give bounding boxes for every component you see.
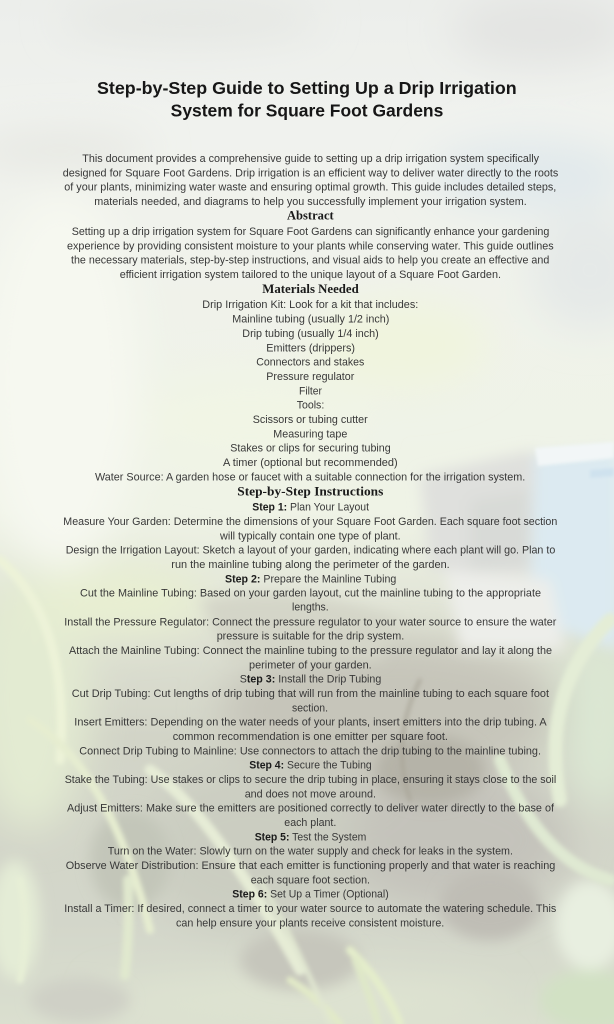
step 2: Step 2: Prepare the Mainline Tubing (225, 573, 396, 585)
step 3: Insert Emitters: Depending on the water needs of your plants, insert emitters into the drip tubing. A (74, 717, 547, 729)
step 3: Step 3: Install the Drip Tubing (240, 674, 381, 686)
abstract text (67, 226, 554, 281)
step 5: Step 5: Test the System (255, 831, 366, 843)
step 6: can help ensure your plants receive consistent moisture. (176, 917, 444, 929)
step 2: perimeter of your garden. (249, 659, 372, 671)
title: System for Square Foot Gardens (171, 101, 443, 121)
step 2 (64, 573, 557, 671)
step 4: Stake the Tubing: Use stakes or clips to secure the drip tubing in place, ensuring it stays close to the soil (65, 774, 556, 786)
step 5: Turn on the Water: Slowly turn on the water supply and check for leaks in the system. (108, 846, 513, 858)
abstract text: Setting up a drip irrigation system for Square Foot Gardens can significantly enhance your gardening (72, 226, 549, 238)
title: Step-by-Step Guide to Setting Up a Drip Irrigation (97, 78, 517, 98)
title (97, 78, 517, 121)
step 6 (64, 889, 557, 929)
step 3: section. (292, 702, 328, 714)
step 3: Connect Drip Tubing to Mainline: Use connectors to attach the drip tubing to the mainline tubing. (79, 745, 541, 757)
step 1: will typically contain one type of plant. (219, 530, 401, 542)
step 5: Observe Water Distribution: Ensure that each emitter is functioning properly and that water is reaching (66, 860, 555, 872)
intro paragraph: This document provides a comprehensive guide to setting up a drip irrigation system specifically (82, 153, 539, 165)
step 4: each plant. (284, 817, 336, 829)
heading: materials needed: Materials Needed (262, 282, 359, 296)
abstract text: experience by providing consistent moisture to your plants while conserving water. This guide outlines (67, 240, 554, 252)
materials list: Filter (299, 385, 322, 397)
step 1: run the mainline tubing along the perimeter of the garden. (171, 559, 450, 571)
step 4: Adjust Emitters: Make sure the emitters are positioned correctly to deliver water directly to the base of (67, 803, 555, 815)
materials list: Drip tubing (usually 1/4 inch) (242, 328, 379, 340)
materials list: Mainline tubing (usually 1/2 inch) (232, 314, 389, 326)
step 2: Attach the Mainline Tubing: Connect the mainline tubing to the pressure regulator and lay it along the (69, 645, 552, 657)
step 2: Cut the Mainline Tubing: Based on your garden layout, cut the mainline tubing to the appropriate (80, 588, 541, 600)
step 3: common recommendation is one emitter per square foot. (173, 731, 448, 743)
materials list: Measuring tape (273, 428, 347, 440)
materials list: Connectors and stakes (256, 357, 365, 369)
heading: step-by-step instructions: Step-by-Step Instructions (237, 484, 383, 498)
materials list (95, 299, 525, 483)
materials list: Drip Irrigation Kit: Look for a kit that includes: (202, 299, 418, 311)
intro paragraph: of your plants, minimizing water waste and ensuring optimal growth. This guide includes detailed steps, (64, 182, 556, 194)
step 2: pressure is suitable for the drip system. (217, 631, 404, 643)
abstract text: the necessary materials, step-by-step instructions, and visual aids to help you create an effective and (71, 255, 549, 267)
materials list: Stakes or clips for securing tubing (230, 443, 391, 455)
materials list: Emitters (drippers) (266, 342, 355, 354)
materials list: A timer (optional but recommended) (223, 457, 398, 469)
heading: abstract: Abstract (287, 209, 334, 223)
step 3 (72, 674, 549, 757)
intro paragraph: materials needed, and diagrams to help you successfully implement your irrigation system. (94, 196, 527, 208)
abstract text: efficient irrigation system tailored to the unique layout of a Square Foot Garden. (120, 269, 501, 281)
step 1: Design the Irrigation Layout: Sketch a layout of your garden, indicating where each plant will go. Plan to (66, 545, 555, 557)
step 1: Measure Your Garden: Determine the dimensions of your Square Foot Garden. Each square foot section (63, 516, 557, 528)
step 6: Step 6: Set Up a Timer (Optional) (232, 889, 389, 901)
intro paragraph (63, 153, 559, 208)
materials list: Water Source: A garden hose or faucet with a suitable connection for the irrigation system. (95, 471, 525, 483)
intro paragraph: designed for Square Foot Gardens. Drip irrigation is an efficient way to deliver water directly to the roots (63, 167, 559, 179)
step 2: lengths. (292, 602, 329, 614)
step 6: Install a Timer: If desired, connect a timer to your water source to automate the watering schedule. This (64, 903, 557, 915)
materials list: Scissors or tubing cutter (253, 414, 368, 426)
materials list: Pressure regulator (266, 371, 355, 383)
step 1: Step 1: Plan Your Layout (252, 501, 369, 513)
materials list: Tools: (297, 400, 324, 412)
step 4 (65, 760, 556, 829)
step 5: each square foot section. (251, 874, 370, 886)
step 4: and does not move around. (245, 788, 376, 800)
step 1 (63, 501, 557, 571)
step 4: Step 4: Secure the Tubing (249, 760, 372, 772)
step 5 (66, 831, 555, 886)
step 3: Cut Drip Tubing: Cut lengths of drip tubing that will run from the mainline tubing to each square foot (72, 688, 549, 700)
step 2: Install the Pressure Regulator: Connect the pressure regulator to your water source to ensure the water (64, 616, 557, 628)
